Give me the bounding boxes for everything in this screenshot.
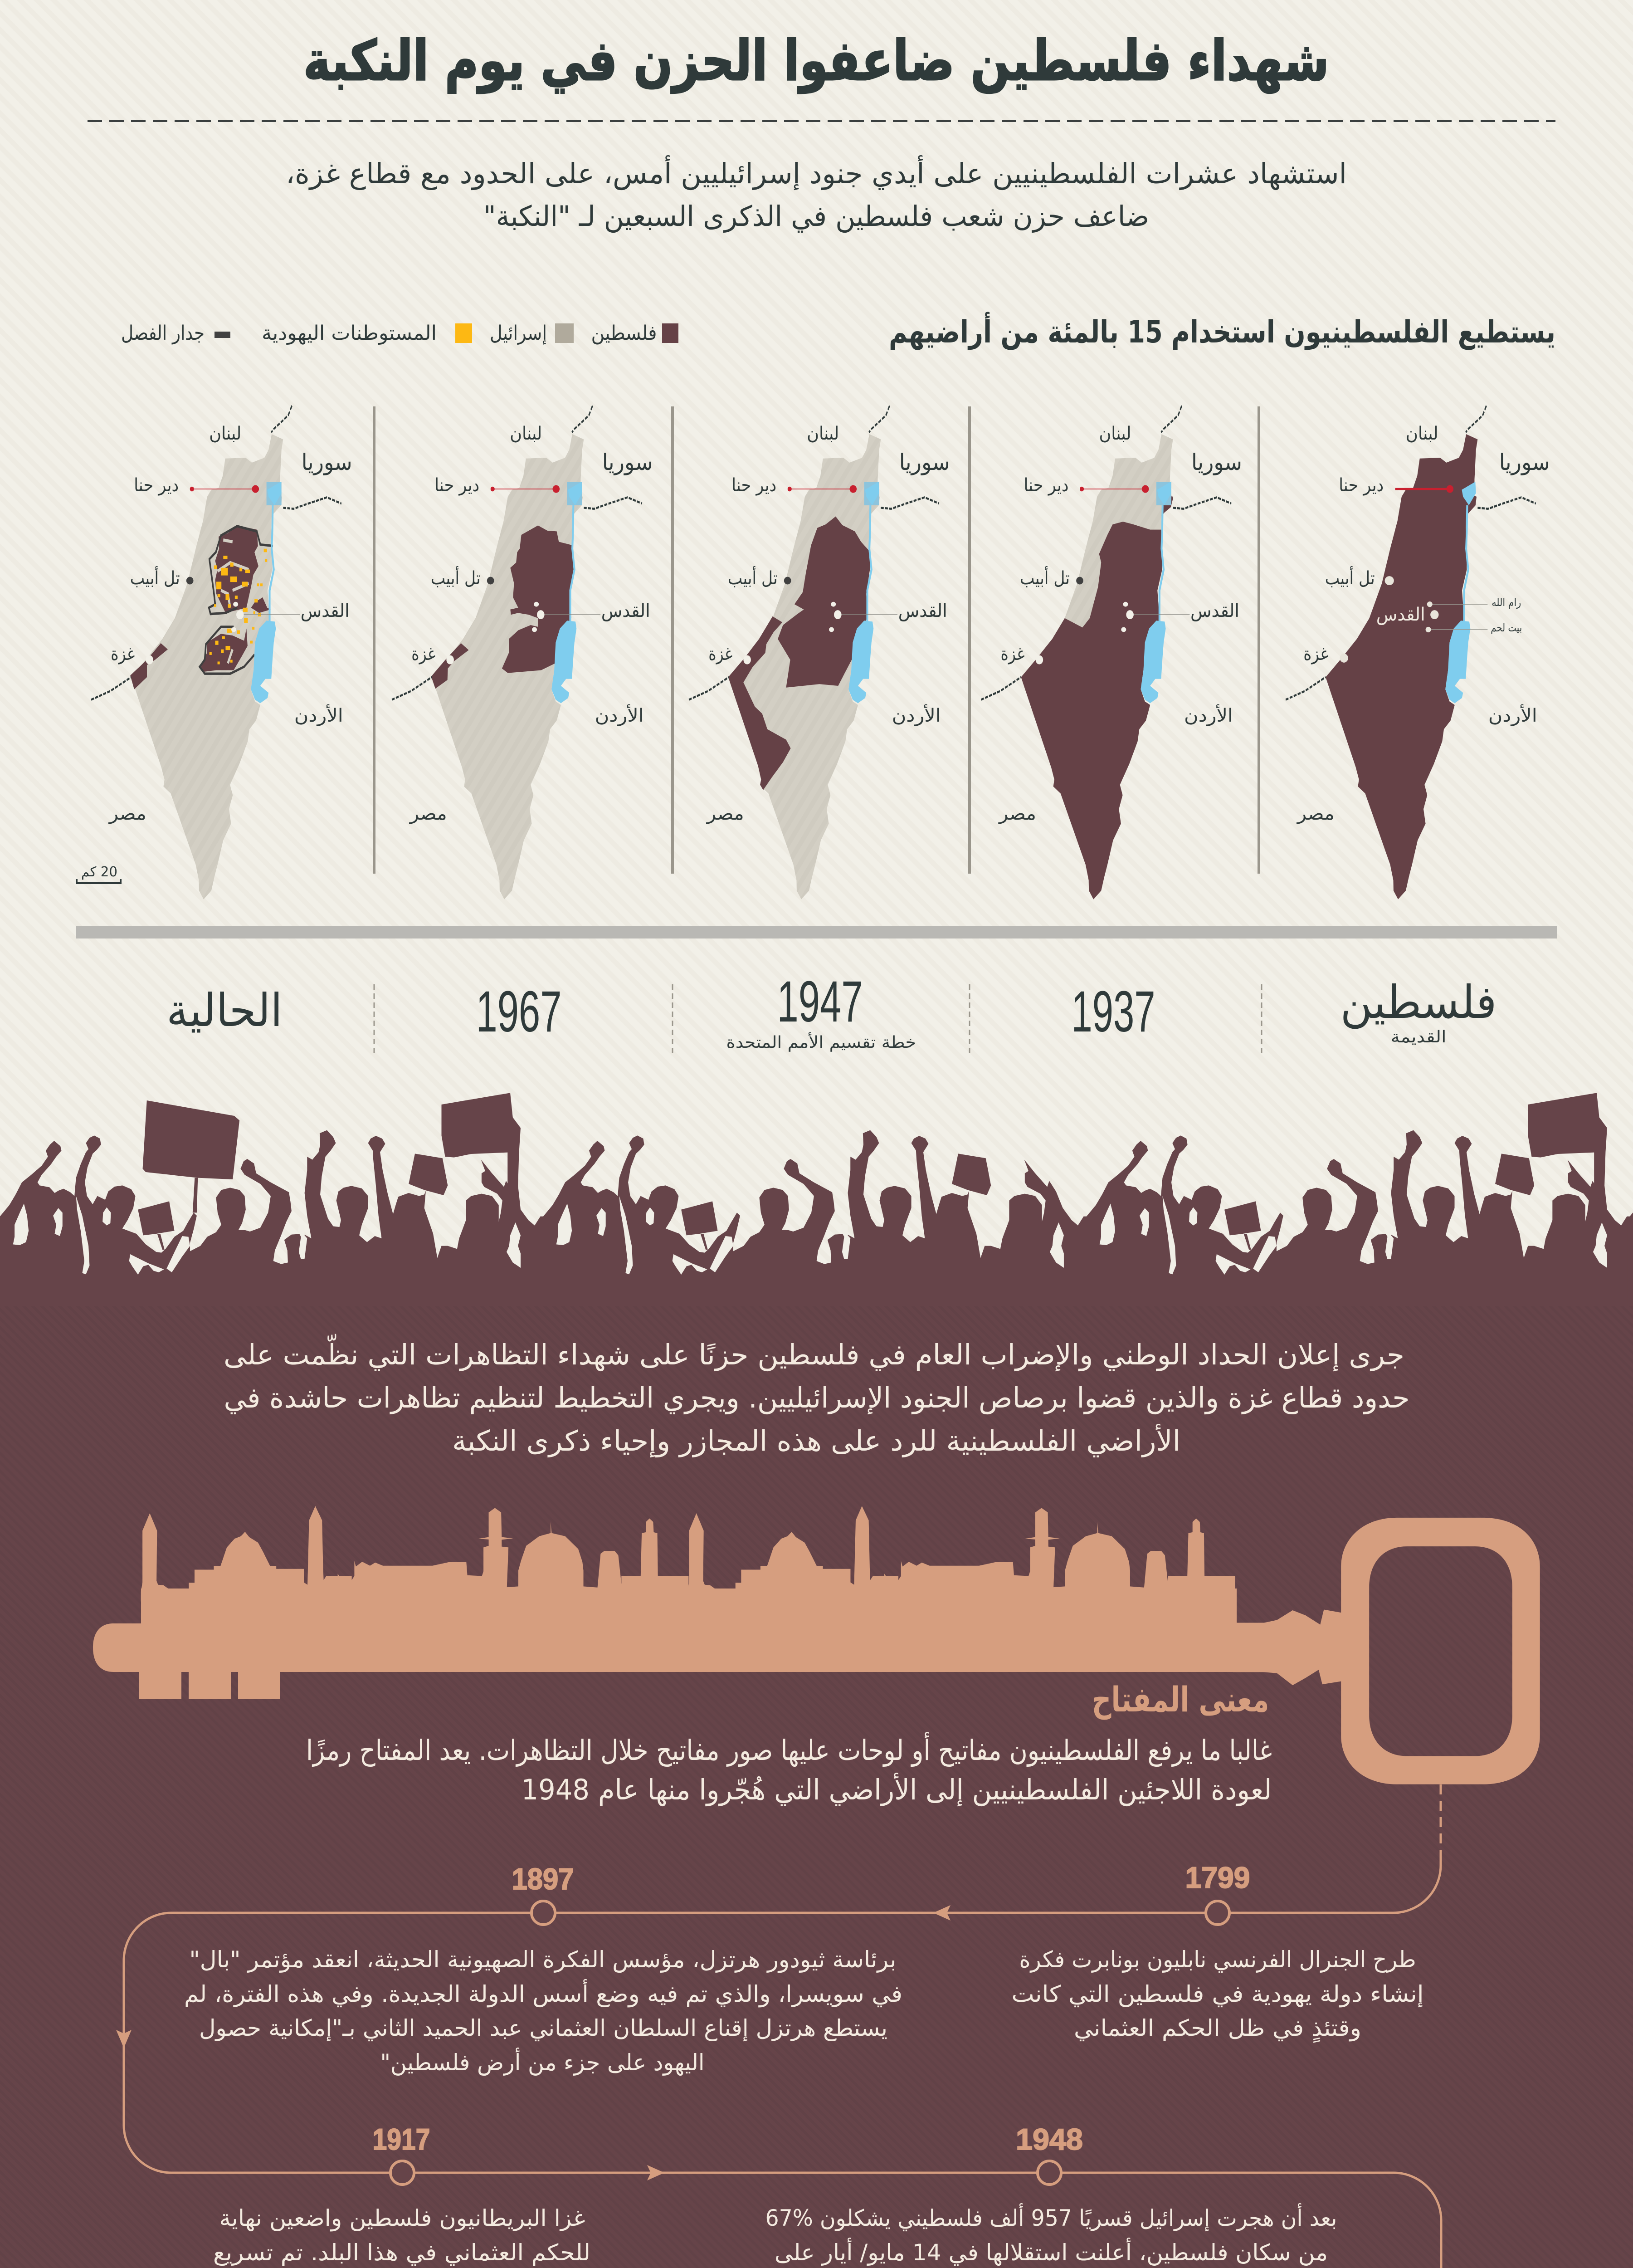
map: 1937: تل أبيب — [1020, 566, 1070, 589]
legend: فلسطين — [591, 322, 657, 345]
map: 1937: غزة — [1000, 644, 1025, 665]
scale bar — [77, 864, 121, 883]
map: 1947 — [689, 406, 950, 899]
title: شهداء فلسطين ضاعفوا الحزن في يوم النكبة — [303, 29, 1329, 93]
section heading: يستطيع الفلسطينيون استخدام 15 بالمئة من أراضيهم — [889, 312, 1555, 350]
era label: 1967: 1967 — [476, 979, 561, 1044]
key meaning text — [306, 1732, 1272, 1807]
map: 1947: الأردن — [892, 704, 941, 726]
map: ancient Palestine: سوريا — [1499, 449, 1550, 475]
era label: 1947 — [726, 969, 916, 1052]
era label: current: الحالية — [166, 984, 283, 1037]
legend — [121, 322, 678, 345]
event 1948: من سكان فلسطين، أعلنت استقلالها في 14 مايو/ أيار على — [775, 2238, 1328, 2266]
map: 1967: مصر — [409, 803, 447, 824]
event 1799: إنشاء دولة يهودية في فلسطين التي كانت — [1011, 1981, 1424, 2008]
main paragraph: حدود قطاع غزة والذين قضوا برصاص الجنود الإسرائيليين. ويجري التخطيط لتنظيم تظاهرات حاشدة في — [224, 1381, 1409, 1415]
map: 1937: سوريا — [1191, 449, 1242, 475]
map: ancient Palestine: لبنان — [1406, 423, 1438, 444]
timeline path — [124, 1784, 1441, 2268]
map: current: دير حنا — [134, 475, 179, 496]
map: ancient Palestine: مصر — [1297, 803, 1335, 824]
map: 1967: سوريا — [602, 449, 653, 475]
map: 1967: الأردن — [595, 704, 644, 726]
map: 1937: مصر — [998, 803, 1036, 824]
key meaning text: غالبا ما يرفع الفلسطينيون مفاتيح أو لوحات عليها صور مفاتيح خلال التظاهرات. يعد المفتاح رمزًا — [306, 1732, 1272, 1767]
event 1799 — [1011, 1861, 1424, 2043]
map: 1937: الأردن — [1184, 704, 1233, 726]
map: current: القدس — [301, 601, 350, 621]
map: 1967 — [392, 406, 653, 899]
map: ancient Palestine: غزة — [1303, 644, 1328, 665]
background: light paper — [0, 0, 1633, 1315]
map: 1947: لبنان — [807, 423, 839, 444]
map: 1947: القدس — [898, 601, 947, 621]
era label: ancient: فلسطين — [1341, 976, 1497, 1029]
key with Jerusalem skyline — [93, 1506, 1540, 1784]
main paragraph: جرى إعلان الحداد الوطني والإضراب العام في فلسطين حزنًا على شهداء التظاهرات التي نظّمت على — [224, 1334, 1404, 1372]
map: current: مصر — [108, 803, 146, 824]
main paragraph: الأراضي الفلسطينية للرد على هذه المجازر وإحياء ذكرى النكبة — [452, 1423, 1180, 1458]
map: ancient Palestine: بيت لحم — [1491, 621, 1522, 634]
event 1799: 1799 — [1185, 1861, 1250, 1894]
era label: 1947: 1947 — [777, 969, 863, 1034]
map: current: غزة — [111, 644, 135, 665]
legend: جدار الفصل — [121, 322, 205, 345]
map: current: الأردن — [294, 704, 343, 726]
map: ancient Palestine — [1286, 406, 1550, 899]
event 1897: 1897 — [512, 1862, 574, 1896]
event 1897: برئاسة ثيودور هرتزل، مؤسس الفكرة الصهيونية الحديثة، انعقد مؤتمر "بال" — [190, 1946, 896, 1973]
scale bar: 20 كم — [81, 864, 117, 880]
crowd silhouette — [0, 1093, 1633, 1306]
map: 1947: تل أبيب — [728, 566, 778, 589]
map: current: لبنان — [209, 423, 241, 444]
event 1799: طرح الجنرال الفرنسي نابليون بونابرت فكرة — [1019, 1946, 1416, 1973]
map: 1947: دير حنا — [731, 475, 776, 496]
map: ancient Palestine: القدس — [1376, 604, 1425, 625]
event 1897: اليهود على جزء من أرض فلسطين" — [380, 2048, 705, 2076]
map: current: سوريا — [302, 449, 352, 475]
map: 1967: غزة — [411, 644, 435, 665]
event 1917: للحكم العثماني في هذا البلد. تم تسريع — [213, 2239, 590, 2266]
map: 1967: تل أبيب — [431, 566, 481, 589]
era label: ancient: القديمة — [1390, 1028, 1447, 1046]
map: 1937 — [981, 406, 1242, 899]
map: 1937: دير حنا — [1024, 475, 1068, 496]
map: ancient Palestine: تل أبيب — [1325, 566, 1375, 589]
event 1917: 1917 — [373, 2122, 430, 2156]
key meaning heading: معنى المفتاح — [1092, 1679, 1269, 1720]
timeline nodes — [390, 1901, 1229, 2268]
event 1897 — [184, 1862, 902, 2076]
map: ancient Palestine: رام الله — [1492, 596, 1521, 609]
event 1948: بعد أن هجرت إسرائيل قسريًا 957 ألف فلسطيني يشكلون %67 — [765, 2203, 1337, 2232]
event 1917: غزا البريطانيون فلسطين واضعين نهاية — [219, 2205, 585, 2232]
map: 1937: لبنان — [1099, 423, 1131, 444]
map: current: تل أبيب — [130, 566, 180, 589]
map: 1947: غزة — [708, 644, 732, 665]
event 1897: يستطع هرتزل إقناع السلطان العثماني عبد الحميد الثاني بـ"إمكانية حصول — [199, 2015, 887, 2042]
map: ancient Palestine: الأردن — [1488, 704, 1537, 726]
timeline arrows — [116, 1905, 1449, 2268]
main paragraph — [224, 1334, 1409, 1458]
map: current — [91, 406, 352, 899]
map: 1967: القدس — [601, 601, 650, 621]
map: 1947: سوريا — [899, 449, 950, 475]
grey timeline bar — [76, 926, 1557, 938]
event 1897: في سويسرا، والذي تم فيه وضع أسس الدولة الجديدة. وفي هذه الفترة، لم — [184, 1979, 902, 2008]
era label: 1947: خطة تقسيم الأمم المتحدة — [726, 1032, 916, 1052]
burgundy lower panel — [0, 1275, 1633, 2268]
event 1917 — [211, 2122, 592, 2268]
map: 1967: دير حنا — [434, 475, 479, 496]
era label: 1937: 1937 — [1071, 979, 1155, 1044]
intro text: استشهاد عشرات الفلسطينيين على أيدي جنود إسرائيليين أمس، على الحدود مع قطاع غزة، — [286, 155, 1347, 191]
legend: إسرائيل — [490, 322, 547, 345]
legend: المستوطنات اليهودية — [262, 322, 437, 345]
intro text: ضاعف حزن شعب فلسطين في الذكرى السبعين لـ "النكبة" — [483, 200, 1149, 233]
event 1948 — [765, 2122, 1337, 2268]
event 1799: وقتئذٍ في ظل الحكم العثماني — [1074, 2015, 1361, 2043]
map: 1937: القدس — [1190, 601, 1239, 621]
event 1948: 1948 — [1016, 2122, 1083, 2156]
key meaning text: لعودة اللاجئين الفلسطينيين إلى الأراضي التي هُجّروا منها عام 1948 — [521, 1772, 1272, 1807]
map: ancient Palestine: دير حنا — [1339, 475, 1384, 496]
map: 1967: لبنان — [510, 423, 542, 444]
map: 1947: مصر — [706, 803, 744, 824]
intro text — [286, 155, 1347, 233]
